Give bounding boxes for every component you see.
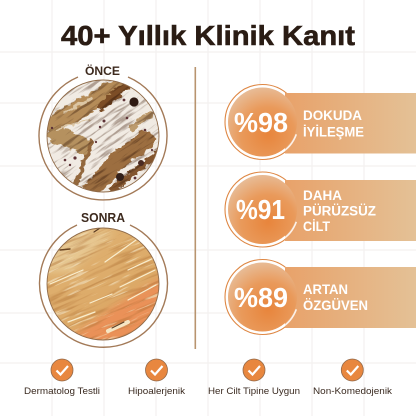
stat circle bbox=[228, 175, 297, 246]
stat label: İYİLEŞME bbox=[303, 124, 364, 140]
image: healthy skin tissue bbox=[47, 228, 159, 340]
stat bar bbox=[285, 180, 416, 241]
stat value: %89 bbox=[234, 282, 288, 313]
image border: before bbox=[47, 80, 159, 192]
stat value: %98 bbox=[234, 107, 288, 138]
fibres bbox=[48, 228, 158, 340]
stat label: DOKUDA bbox=[303, 108, 362, 123]
stat label: PÜRÜZSÜZ bbox=[303, 204, 376, 218]
ring: after bbox=[39, 225, 167, 347]
stat ring bbox=[225, 172, 300, 247]
stat circle bbox=[228, 88, 297, 158]
badge label: Hipoalerjenik bbox=[128, 386, 185, 397]
warm area bbox=[76, 279, 158, 340]
tissue fibres bbox=[48, 80, 158, 190]
badge label: Dermatolog Testli bbox=[24, 386, 100, 397]
badge: dermatologically tested bbox=[24, 359, 100, 397]
label: before: ÖNCE bbox=[85, 63, 120, 78]
pale area bbox=[45, 232, 115, 272]
icon: check bbox=[341, 359, 363, 381]
badge: hypoallergenic bbox=[128, 359, 185, 397]
stat ring bbox=[225, 84, 300, 160]
stat circle bbox=[228, 262, 297, 333]
title: 40+ Yıllık Klinik Kanıt bbox=[61, 20, 355, 51]
badge: for all skin types bbox=[208, 359, 300, 397]
icon: check bbox=[243, 359, 265, 381]
panel: before bbox=[38, 64, 168, 201]
stat bar bbox=[285, 267, 416, 328]
icon: check bbox=[51, 359, 73, 381]
stat label: DAHA bbox=[303, 188, 342, 203]
badge label: Non-Komedojenik bbox=[313, 386, 392, 397]
divider bbox=[194, 67, 196, 349]
stat label: ÖZGÜVEN bbox=[303, 298, 368, 313]
ring: before bbox=[39, 77, 167, 200]
stat ring bbox=[225, 260, 300, 334]
stat label: ARTAN bbox=[303, 282, 348, 297]
label: after: SONRA bbox=[81, 211, 125, 225]
badge label: Her Cilt Tipine Uygun bbox=[208, 386, 300, 397]
image border: after bbox=[47, 228, 159, 340]
stat label: CİLT bbox=[303, 219, 331, 234]
panel: after bbox=[38, 213, 168, 348]
stat bar bbox=[285, 93, 416, 154]
stat: 91 percent bbox=[225, 172, 416, 247]
stat value: %91 bbox=[236, 194, 285, 225]
image: damaged skin tissue bbox=[47, 80, 158, 192]
icon: check bbox=[146, 359, 168, 381]
stat: 98 percent bbox=[225, 84, 416, 160]
stat: 89 percent bbox=[225, 260, 416, 334]
badge: non-comedogenic bbox=[313, 359, 392, 397]
